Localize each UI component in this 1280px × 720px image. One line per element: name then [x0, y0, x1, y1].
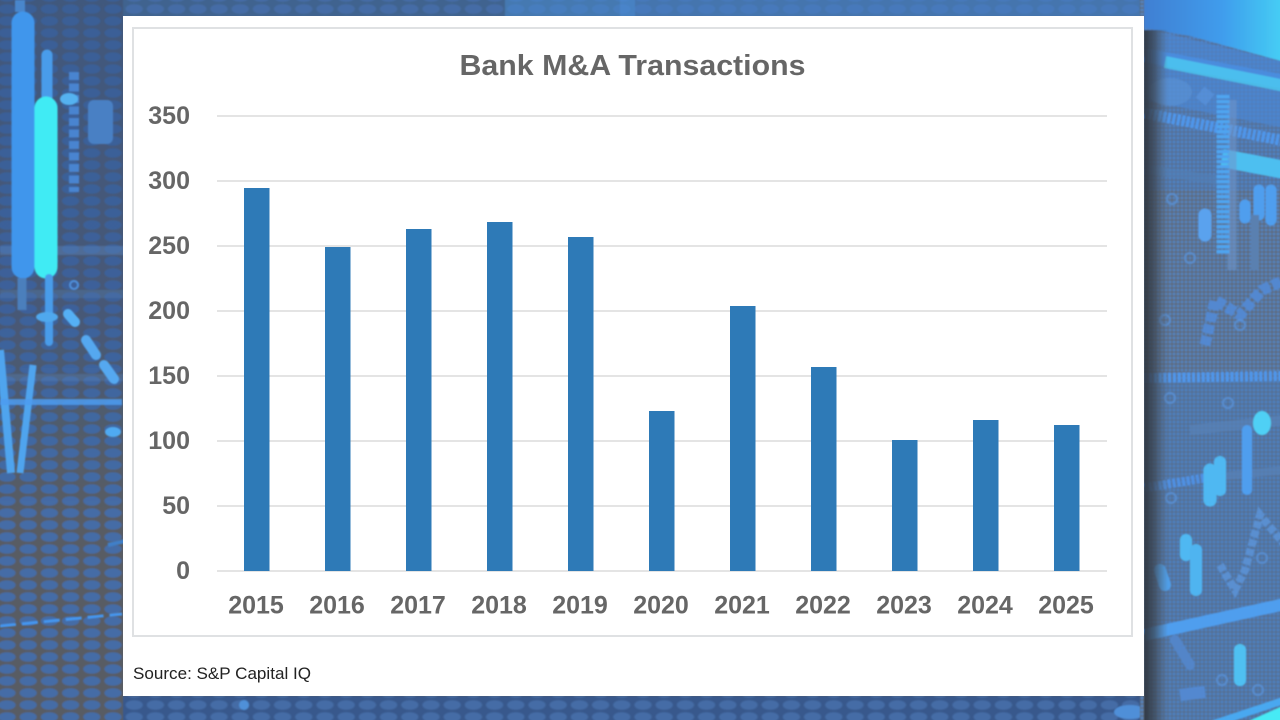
y-axis labels: 150 [148, 362, 190, 390]
background: left glowing candlestick columns [0, 0, 125, 626]
y-axis labels: 0 [176, 557, 190, 585]
x-axis labels: 2023 [876, 592, 932, 620]
y-axis labels: 100 [148, 427, 190, 455]
x-axis labels: 2016 [309, 592, 365, 620]
source note: Source: S&P Capital IQ [133, 665, 311, 683]
x-axis labels: 2018 [471, 592, 527, 620]
y-axis labels: 200 [148, 297, 190, 325]
x-axis labels [228, 592, 1094, 620]
background: left dotted panel [0, 0, 130, 720]
background: right data panel [1140, 0, 1280, 720]
x-axis labels: 2021 [714, 592, 770, 620]
x-axis labels: 2020 [633, 592, 689, 620]
y-axis labels: 350 [148, 102, 190, 130]
white card [123, 16, 1144, 696]
gridlines [217, 116, 1107, 571]
background: top strip [123, 0, 1145, 17]
y-axis labels [148, 102, 190, 585]
x-axis labels: 2025 [1038, 592, 1094, 620]
bars [244, 188, 1080, 571]
x-axis labels: 2019 [552, 592, 608, 620]
x-axis labels: 2024 [957, 592, 1013, 620]
background: bottom strip [123, 696, 1146, 720]
bar chart: Bank M&A Transactions [148, 102, 1107, 620]
y-axis labels: 50 [162, 492, 190, 520]
chart title: Bank M&A Transactions [460, 50, 806, 82]
y-axis labels: 250 [148, 232, 190, 260]
x-axis labels: 2017 [390, 592, 446, 620]
x-axis labels: 2022 [795, 592, 851, 620]
x-axis labels: 2015 [228, 592, 284, 620]
y-axis labels: 300 [148, 167, 190, 195]
